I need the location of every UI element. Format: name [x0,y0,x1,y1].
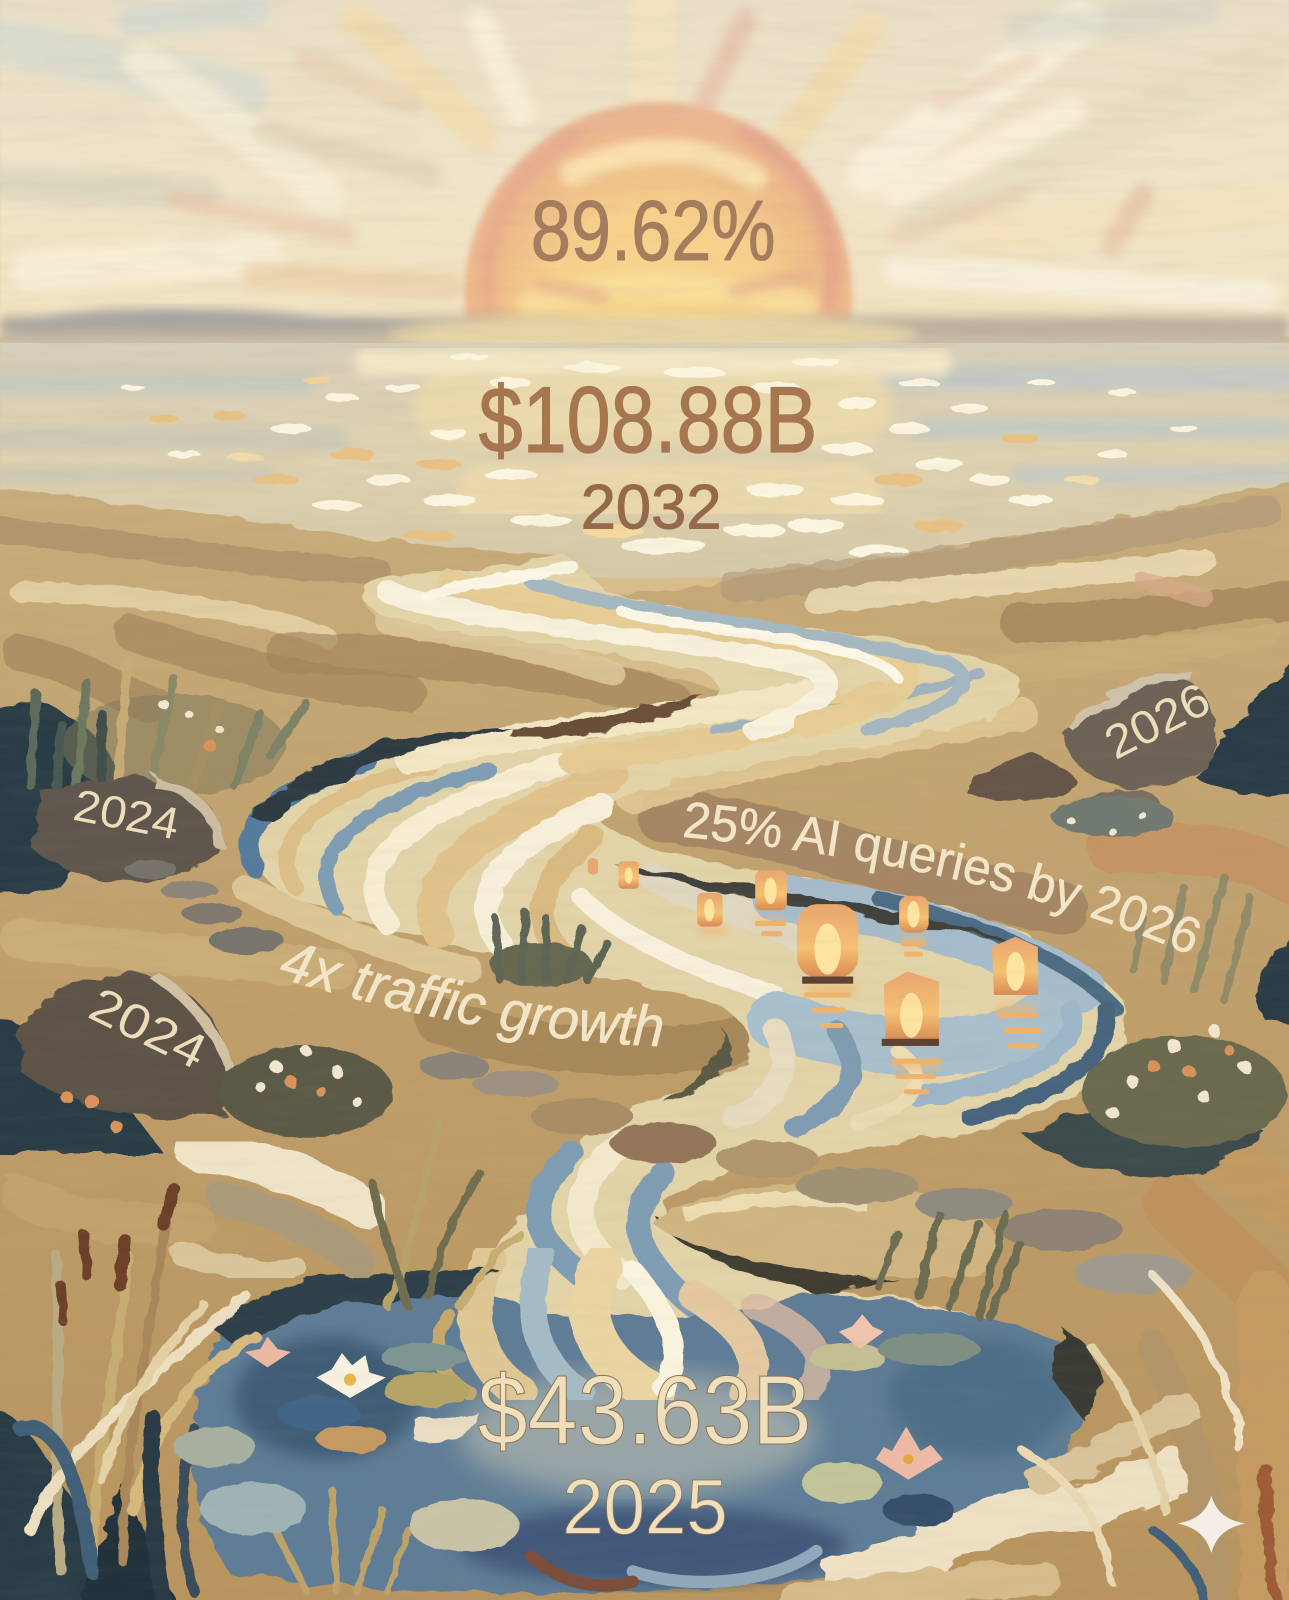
label: 25% AI queries by 2026: 25% AI queries by 2026 [684,802,1200,952]
label: 2032: 2032 [581,473,722,543]
river [196,556,1126,1591]
pond water [193,1288,1084,1593]
dark foliage masses [0,653,1289,1600]
river flowing into pond [438,1255,818,1393]
sun [464,102,852,490]
rocks with year labels [21,678,1216,1119]
horizon band [0,308,1289,353]
grasses upper left [31,663,306,796]
lantern reflections [757,923,1039,1092]
lily pads [174,1333,980,1552]
label: 2024 upper rock: 2024 [70,779,184,849]
sun brush accents [488,133,832,306]
stat: 89.62%: 89.62% [531,183,776,279]
river current strokes [249,566,1117,1306]
sea [0,343,1289,578]
sea sparkle dabs [121,354,1198,557]
label: 2025: 2025 [562,1465,728,1551]
pale meadow tufts lower left [21,1148,367,1272]
label: 2024 lower rock: 2024 [81,978,215,1080]
label: 2026 rock: 2026 [1096,673,1218,769]
icon: sparkle watermark [1178,1496,1245,1553]
wildflower and shrub clusters [60,699,1286,1148]
floating lanterns [588,858,1038,1069]
stat: $108.88B: $108.88B [479,367,817,472]
sandy land [0,474,1289,1600]
sky with brushed sun rays [0,0,1289,337]
land brushwork [0,510,1289,1316]
pale sweep and reeds lower right [796,1276,1276,1600]
stat: $43.63B: $43.63B [478,1355,812,1465]
reeds left [21,1122,1021,1600]
stepping stones [125,860,1192,1294]
water lilies [245,1314,943,1480]
label: 4x traffic growth: 4x traffic growth [280,946,662,1046]
